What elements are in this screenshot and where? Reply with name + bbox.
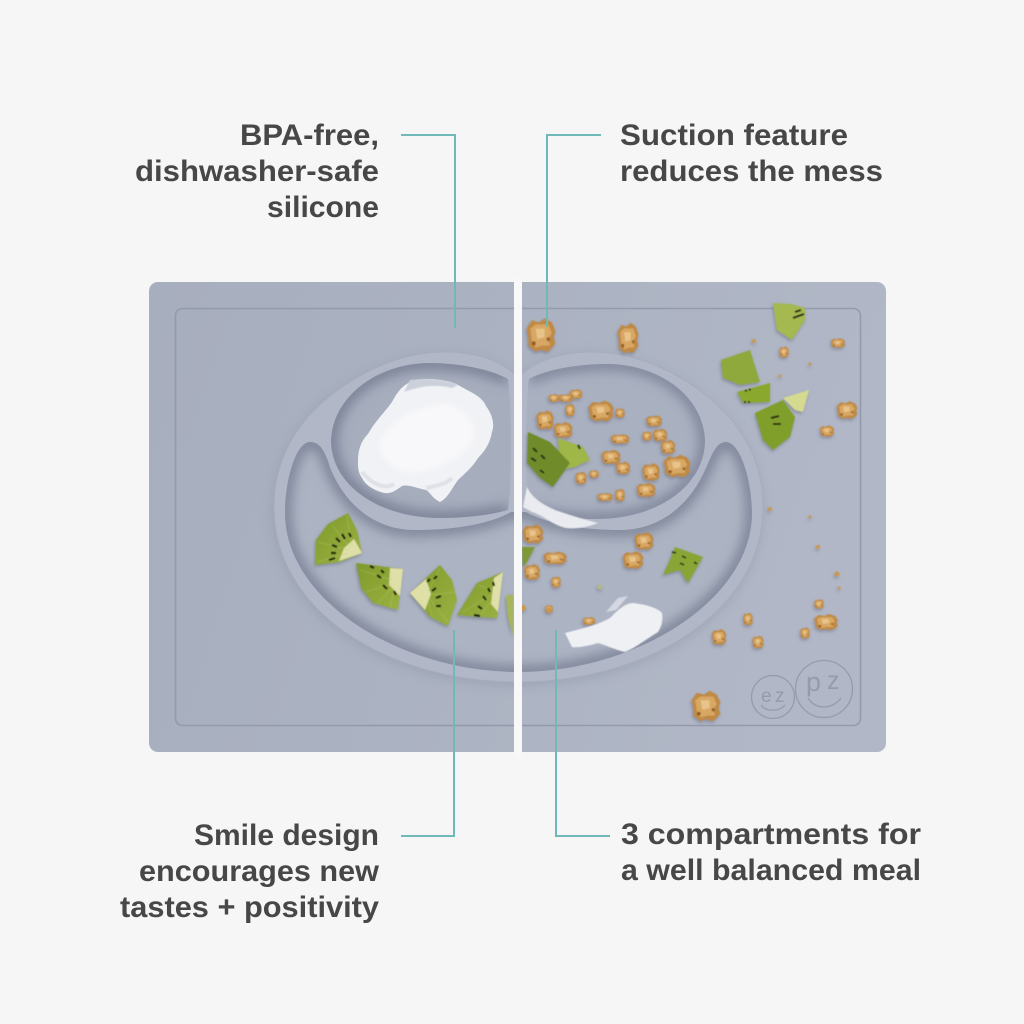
label: smile design: encourages new <box>139 855 380 888</box>
yogurt in left eye <box>358 379 493 502</box>
logo embossed <box>752 660 852 718</box>
label: suction feature: reduces the mess <box>620 155 883 188</box>
mouth compartment <box>280 435 760 675</box>
mat raised border line <box>176 308 860 726</box>
kiwi 1 <box>315 513 362 565</box>
small logo circle <box>752 676 794 718</box>
crumbs <box>520 339 840 612</box>
label: suction feature: Suction feature <box>620 119 848 152</box>
shadow around plate <box>273 355 762 685</box>
connector: compartments <box>556 630 610 836</box>
label: compartments: 3 compartments for <box>621 818 921 851</box>
small logo circle: e <box>761 686 772 707</box>
kiwi wedges in mouth, left half <box>315 513 513 636</box>
granola in right eye <box>548 394 560 402</box>
label: smile design: tastes + positivity <box>120 891 379 924</box>
yogurt smear in mouth <box>565 603 662 652</box>
kiwi pieces on mat <box>773 303 805 340</box>
kiwi 5 <box>506 594 513 636</box>
granola top <box>527 318 555 352</box>
kiwi in right eye <box>558 438 590 470</box>
kiwi 3 <box>410 565 457 626</box>
label: BPA-free silicone: dishwasher-safe <box>135 155 379 188</box>
kiwi 4 <box>457 572 503 618</box>
granola on mat <box>831 338 845 348</box>
large logo circle: p <box>806 667 821 697</box>
label: BPA-free silicone: BPA-free, <box>240 119 379 152</box>
label: BPA-free silicone <box>135 119 379 224</box>
label: smile design: Smile design <box>194 819 379 852</box>
large logo circle: z <box>827 667 840 695</box>
white divider <box>514 278 522 756</box>
connector: BPA-free <box>401 135 455 328</box>
kiwi 2 <box>356 563 403 610</box>
label: BPA-free silicone: silicone <box>267 191 379 224</box>
placemat <box>149 282 886 752</box>
yogurt smears, right half <box>523 487 662 652</box>
small logo circle: z <box>775 686 784 707</box>
label: smile design <box>120 819 380 924</box>
label: compartments: a well balanced meal <box>621 854 921 887</box>
large logo circle <box>796 660 852 718</box>
smile plate rim <box>274 352 763 682</box>
label: suction feature <box>620 119 883 188</box>
left eye compartment <box>331 363 511 518</box>
connector: suction <box>547 135 601 327</box>
kiwi in mouth <box>663 547 703 583</box>
right eye compartment <box>528 364 705 519</box>
granola and kiwi in right half <box>520 303 857 721</box>
connector: smile design <box>401 630 454 836</box>
yogurt smear in right eye <box>523 487 598 528</box>
granola in mouth <box>523 524 543 544</box>
label: compartments <box>621 818 921 887</box>
mat base <box>149 282 886 752</box>
